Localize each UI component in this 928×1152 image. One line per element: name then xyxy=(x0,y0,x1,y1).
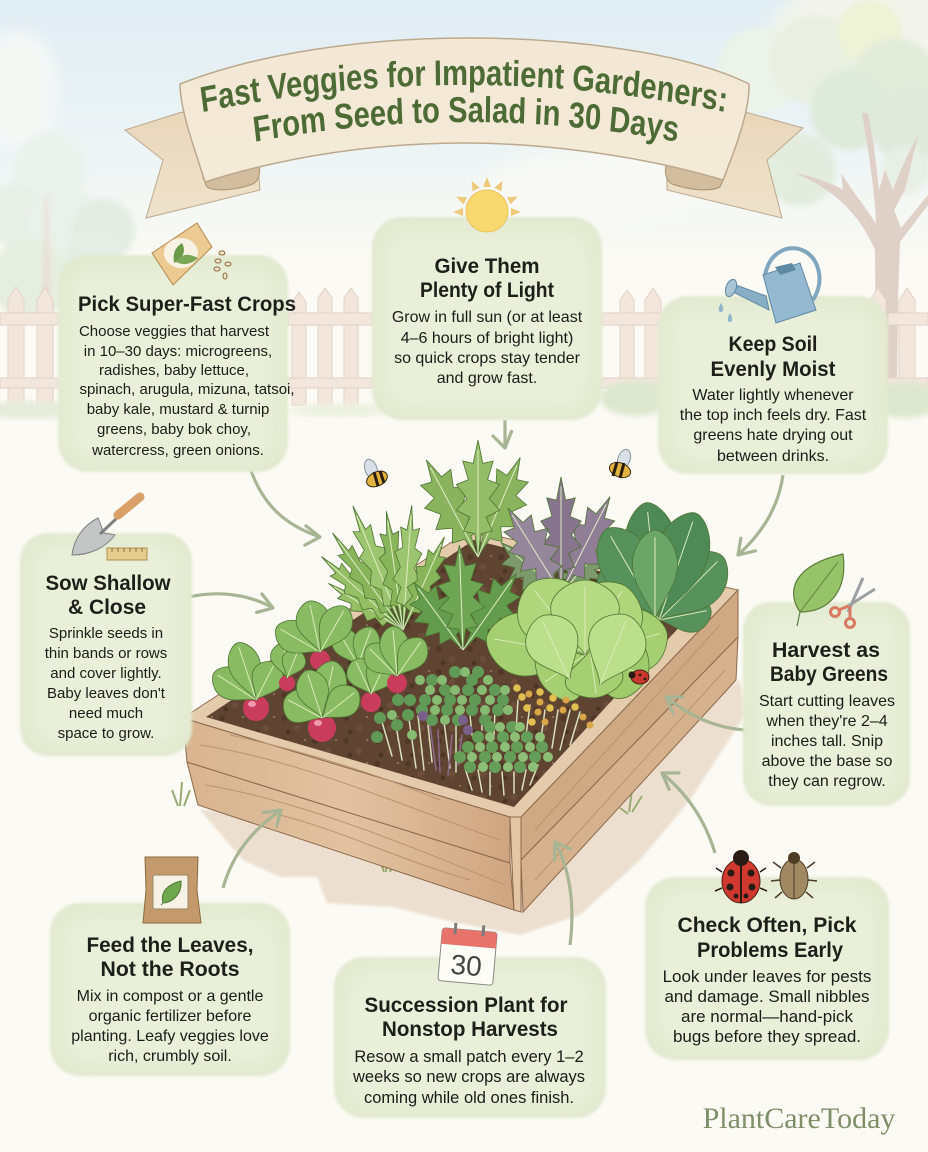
panel: succession plant xyxy=(334,957,606,1118)
bed: top rim xyxy=(183,530,738,817)
body text: thin bands or rows xyxy=(45,645,167,662)
body text: Baby leaves don't xyxy=(47,685,166,702)
body text: Grow in full sun (or at least xyxy=(392,309,583,326)
body text: 4–6 hours of bright light) xyxy=(401,330,573,347)
icon: calendar xyxy=(438,922,498,985)
icon: beetle xyxy=(771,852,817,899)
panel: give them plenty of light xyxy=(372,217,602,420)
body text: Look under leaves for pests xyxy=(663,967,871,986)
plant: lettuce with ladybug xyxy=(481,563,675,710)
body text: in 10–30 days: microgreens, xyxy=(84,343,272,360)
body text: and grow fast. xyxy=(437,370,537,387)
heading line two: & Close xyxy=(68,596,146,619)
bed: upper front board xyxy=(183,718,510,863)
plant: mizuna xyxy=(313,501,457,640)
right ribbon fold xyxy=(665,160,725,190)
plant: purple mustard xyxy=(486,477,629,611)
left ribbon fold xyxy=(203,160,260,190)
body text: between drinks. xyxy=(717,448,829,465)
ribbon body xyxy=(180,38,749,182)
panel: check often xyxy=(645,877,889,1060)
body text: above the base so xyxy=(762,753,892,770)
body text: planting. Leafy veggies love xyxy=(71,1028,269,1045)
body text: they can regrow. xyxy=(768,773,886,790)
heading line two: Problems Early xyxy=(697,939,843,962)
body text: inches tall. Snip xyxy=(771,733,883,750)
heading: Keep Soil xyxy=(728,333,818,356)
heading line two: Baby Greens xyxy=(770,663,888,686)
body text: spinach, arugula, mizuna, tatsoi, xyxy=(79,381,295,398)
icon: sun xyxy=(453,177,521,232)
ladybug on leaf xyxy=(628,670,649,684)
heading line two: Nonstop Harvests xyxy=(382,1018,558,1041)
body text: Water lightly whenever xyxy=(692,387,854,404)
arrow: crops to bed xyxy=(249,465,322,548)
icon: leaf and scissors xyxy=(794,554,875,628)
watermark: PlantCareToday xyxy=(703,1102,895,1135)
plant: radishes xyxy=(205,598,435,742)
panel: feed the leaves xyxy=(50,903,290,1076)
body text: Sprinkle seeds in xyxy=(49,625,163,642)
body text: greens, baby bok choy, xyxy=(97,421,251,438)
right tree xyxy=(718,0,928,206)
panel: sow shallow and close xyxy=(20,533,192,756)
body text: need much xyxy=(69,705,143,722)
icon: ladybug xyxy=(715,850,767,903)
bed: right side boards xyxy=(521,590,738,860)
body text: greens hate drying out xyxy=(693,427,853,444)
heading: Harvest as xyxy=(772,639,880,662)
body text: watercress, green onions. xyxy=(91,442,264,459)
body text: are normal—hand-pick xyxy=(681,1007,853,1026)
arrow: succession to bed xyxy=(548,837,572,945)
title line two: From Seed to Salad in 30 Days xyxy=(254,96,678,144)
body text: baby kale, mustard & turnip xyxy=(87,401,269,418)
body text: the top inch feels dry. Fast xyxy=(680,407,867,424)
bee right xyxy=(607,448,633,480)
icon: calendar: 30 xyxy=(449,949,483,982)
arrow: light to bed xyxy=(493,420,513,449)
fence xyxy=(0,287,928,410)
body text: rich, crumbly soil. xyxy=(108,1048,232,1065)
icon: watering can xyxy=(719,248,819,323)
heading: Give Them xyxy=(434,255,540,278)
body text: Choose veggies that harvest xyxy=(79,323,270,340)
arrow: water to bed xyxy=(731,475,783,561)
panel: harvest as baby greens xyxy=(743,602,910,806)
heading: Succession Plant for xyxy=(364,994,568,1017)
body text: radishes, baby lettuce, xyxy=(99,362,249,379)
heading: Feed the Leaves, xyxy=(86,934,254,957)
soil xyxy=(206,540,706,807)
bee left xyxy=(362,458,390,490)
heading line two: Evenly Moist xyxy=(710,358,836,381)
arrow: harvest to lettuce xyxy=(661,689,745,730)
body text: so quick crops stay tender xyxy=(394,350,581,367)
body text: when they're 2–4 xyxy=(765,713,888,730)
body text: organic fertilizer before xyxy=(89,1008,251,1025)
arrow: sow to bed xyxy=(189,594,276,618)
title banner xyxy=(124,37,804,219)
body text: and damage. Small nibbles xyxy=(664,987,870,1006)
panel: keep soil evenly moist xyxy=(658,296,888,474)
body text: Mix in compost or a gentle xyxy=(77,988,263,1005)
heading: Pick Super-Fast Crops xyxy=(78,293,296,316)
body text: space to grow. xyxy=(58,725,154,742)
heading: Check Often, Pick xyxy=(678,914,857,937)
plant: microgreens xyxy=(377,672,590,795)
icon: seed packet xyxy=(152,223,231,285)
body text: coming while old ones finish. xyxy=(364,1089,574,1107)
plant: tall arugula xyxy=(405,440,543,568)
heading line two: Not the Roots xyxy=(100,958,240,981)
icon: trowel and ruler xyxy=(72,497,147,560)
left tree xyxy=(0,132,135,320)
arrow: feed to bed xyxy=(223,803,287,888)
panel: pick super-fast crops xyxy=(58,255,296,472)
raised garden bed xyxy=(183,530,738,912)
bed: lower front boards xyxy=(187,762,514,910)
body text: Start cutting leaves xyxy=(759,693,895,710)
body text: weeks so new crops are always xyxy=(352,1068,585,1086)
arrow: check to bed xyxy=(657,765,715,853)
body text: and cover lightly. xyxy=(50,665,162,682)
icon: compost bag xyxy=(143,857,201,923)
ground shadow under bed xyxy=(200,680,745,935)
plant: front arugula xyxy=(396,544,535,663)
heading: Sow Shallow xyxy=(46,572,171,595)
right ribbon tail xyxy=(667,112,803,218)
plant: spinach xyxy=(584,500,741,640)
body text: bugs before they spread. xyxy=(673,1027,861,1046)
title line one: Fast Veggies for Impatient Gardeners: xyxy=(200,60,726,112)
body text: Resow a small patch every 1–2 xyxy=(354,1048,584,1066)
left ribbon tail xyxy=(125,112,260,218)
heading line two: Plenty of Light xyxy=(420,279,554,302)
